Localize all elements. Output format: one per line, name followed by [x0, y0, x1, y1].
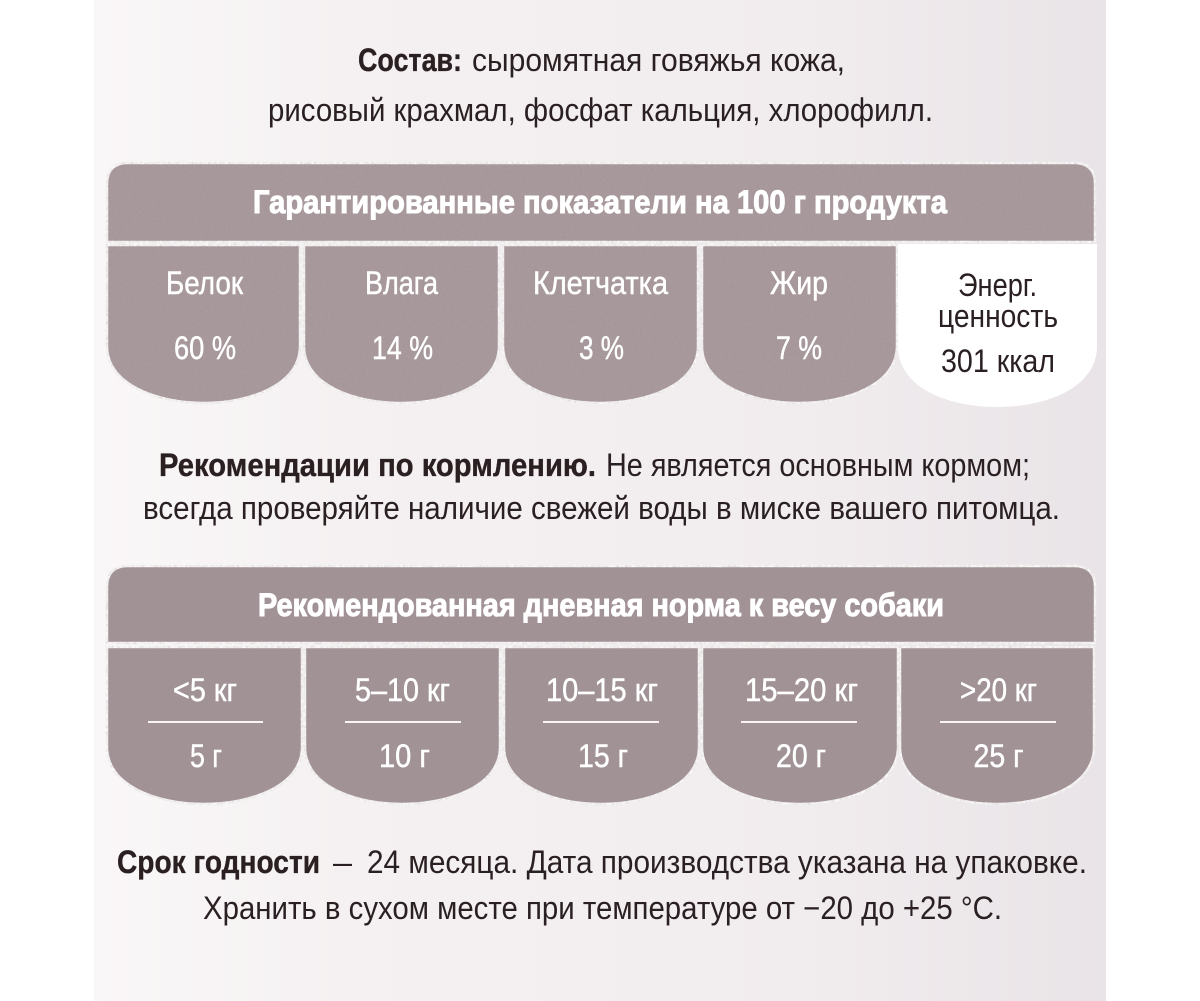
feeding recommendations text: всегда проверяйте наличие свежей воды в миске вашего питомца.	[143, 490, 1060, 526]
cell: fat: 7 %	[776, 330, 822, 366]
cell: fat	[702, 245, 897, 403]
cell: 10-15 kg	[504, 647, 699, 804]
cell: fat: Жир	[770, 265, 828, 301]
cell: 5-10 kg: 10 г	[379, 738, 430, 774]
cell: moisture: Влага	[365, 265, 438, 301]
cell: 15-20 kg: 20 г	[776, 738, 826, 774]
cell: 10-15 kg: 10–15 кг	[546, 672, 658, 708]
cell: 15-20 kg	[702, 647, 898, 804]
feeding recommendations text	[143, 447, 1060, 526]
cell: under 5 kg	[107, 647, 302, 804]
cell: 5-10 kg: 5–10 кг	[355, 672, 450, 708]
cell: 15-20 kg: 15–20 кг	[745, 672, 858, 708]
panel: guaranteed values	[107, 163, 1097, 407]
shelf life and storage text	[117, 844, 1087, 926]
ingredients text: Состав:	[358, 42, 462, 78]
cell: moisture	[304, 245, 499, 403]
cell: over 20 kg: 25 г	[974, 738, 1024, 774]
panel header: guaranteed values	[107, 163, 1095, 242]
cell: under 5 kg: 5 г	[190, 738, 222, 774]
cell: 10-15 kg: 15 г	[578, 738, 628, 774]
cell: fibre	[503, 245, 698, 403]
panel header: guaranteed values: Гарантированные показатели на 100 г продукта	[253, 184, 947, 220]
ingredients text: рисовый крахмал, фосфат кальция, хлорофилл.	[268, 92, 933, 128]
ingredients text: сыромятная говяжья кожа,	[472, 42, 845, 78]
cell: under 5 kg: <5 кг	[173, 672, 237, 708]
feeding recommendations text: Не является основным кормом;	[606, 447, 1030, 483]
cell: protein: Белок	[166, 265, 244, 301]
shelf life and storage text: Хранить в сухом месте при температуре от −20 до +25 °С.	[203, 890, 1002, 926]
panel header: daily norm: Рекомендованная дневная норма к весу собаки	[258, 587, 944, 623]
cell: over 20 kg: >20 кг	[960, 672, 1037, 708]
cell: fibre: Клетчатка	[533, 265, 668, 301]
cell: fibre: 3 %	[579, 330, 624, 366]
ingredients text	[268, 42, 933, 128]
feeding recommendations text: Рекомендации по кормлению.	[159, 447, 596, 483]
cell: over 20 kg	[900, 647, 1094, 804]
cell: energy value	[898, 244, 1097, 407]
cell: 5-10 kg	[305, 647, 500, 804]
shelf life and storage text: –	[333, 844, 352, 880]
shelf life and storage text: 24 месяца. Дата производства указана на упаковке.	[367, 844, 1087, 880]
panel: daily norm	[107, 566, 1095, 804]
cell: moisture: 14 %	[372, 330, 433, 366]
cell: protein	[107, 245, 300, 403]
shelf life and storage text: Срок годности	[117, 844, 320, 880]
cell: energy value: Энерг.	[958, 267, 1037, 303]
cell: protein: 60 %	[174, 330, 236, 366]
cell: energy value: 301 ккал	[941, 343, 1055, 379]
cell: energy value: ценность	[938, 298, 1058, 334]
panel header: daily norm	[107, 566, 1095, 643]
